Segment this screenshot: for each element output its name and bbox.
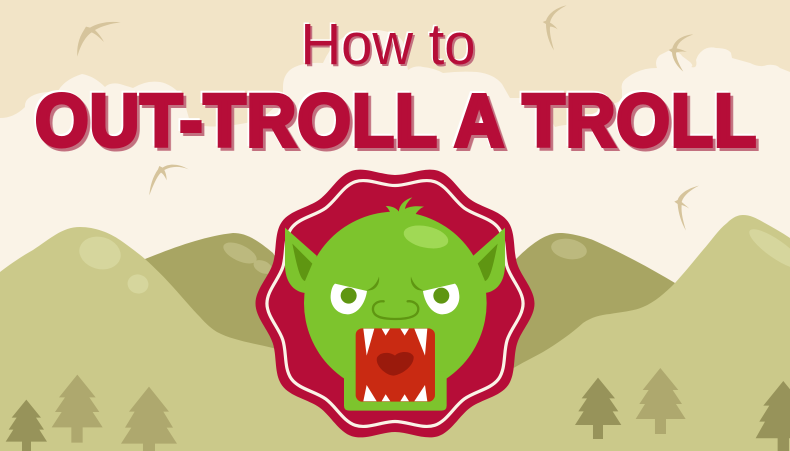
tree 6 xyxy=(756,381,790,451)
highlights: back mountains xyxy=(220,236,588,277)
icon: swallow top right xyxy=(669,34,693,72)
tree 1 xyxy=(6,400,47,451)
icon: swallow top centre xyxy=(543,5,567,50)
trees left xyxy=(6,375,177,451)
upper teeth xyxy=(363,329,427,356)
tree 3 xyxy=(121,387,177,451)
right ear xyxy=(472,228,505,293)
heart tongue xyxy=(377,352,414,376)
left pupil xyxy=(341,288,357,304)
highlights: front mountains xyxy=(76,223,790,296)
title line: Out-Troll a Troll: OUT-TROLL A TROLL xyxy=(35,78,757,162)
icon: swallow top left xyxy=(77,22,121,57)
right inner ear xyxy=(478,244,498,281)
left eye xyxy=(331,284,367,314)
head highlight xyxy=(402,222,450,252)
right pupil xyxy=(433,288,449,304)
tree 4 xyxy=(575,378,621,439)
right brow xyxy=(411,277,423,290)
badge xyxy=(256,170,534,437)
nose xyxy=(373,301,418,319)
trees right xyxy=(575,368,790,451)
title line: How to: How to xyxy=(300,12,476,77)
lower teeth xyxy=(363,385,427,401)
badge seal xyxy=(256,170,534,437)
tree 2 xyxy=(52,375,103,443)
troll face xyxy=(285,197,505,411)
icon: swallow mid left xyxy=(149,165,189,195)
head xyxy=(304,212,487,394)
front mountains xyxy=(0,215,790,451)
mouth xyxy=(356,328,435,402)
hair tuft xyxy=(386,197,424,217)
icon: swallow mid right xyxy=(674,186,699,231)
tree 5 xyxy=(636,368,686,434)
right eye xyxy=(423,284,459,314)
left brow xyxy=(367,277,379,290)
left inner ear xyxy=(292,244,312,281)
jaw xyxy=(344,372,447,411)
back mountains xyxy=(145,233,675,420)
left ear xyxy=(285,228,318,293)
badge inner line xyxy=(267,181,523,426)
